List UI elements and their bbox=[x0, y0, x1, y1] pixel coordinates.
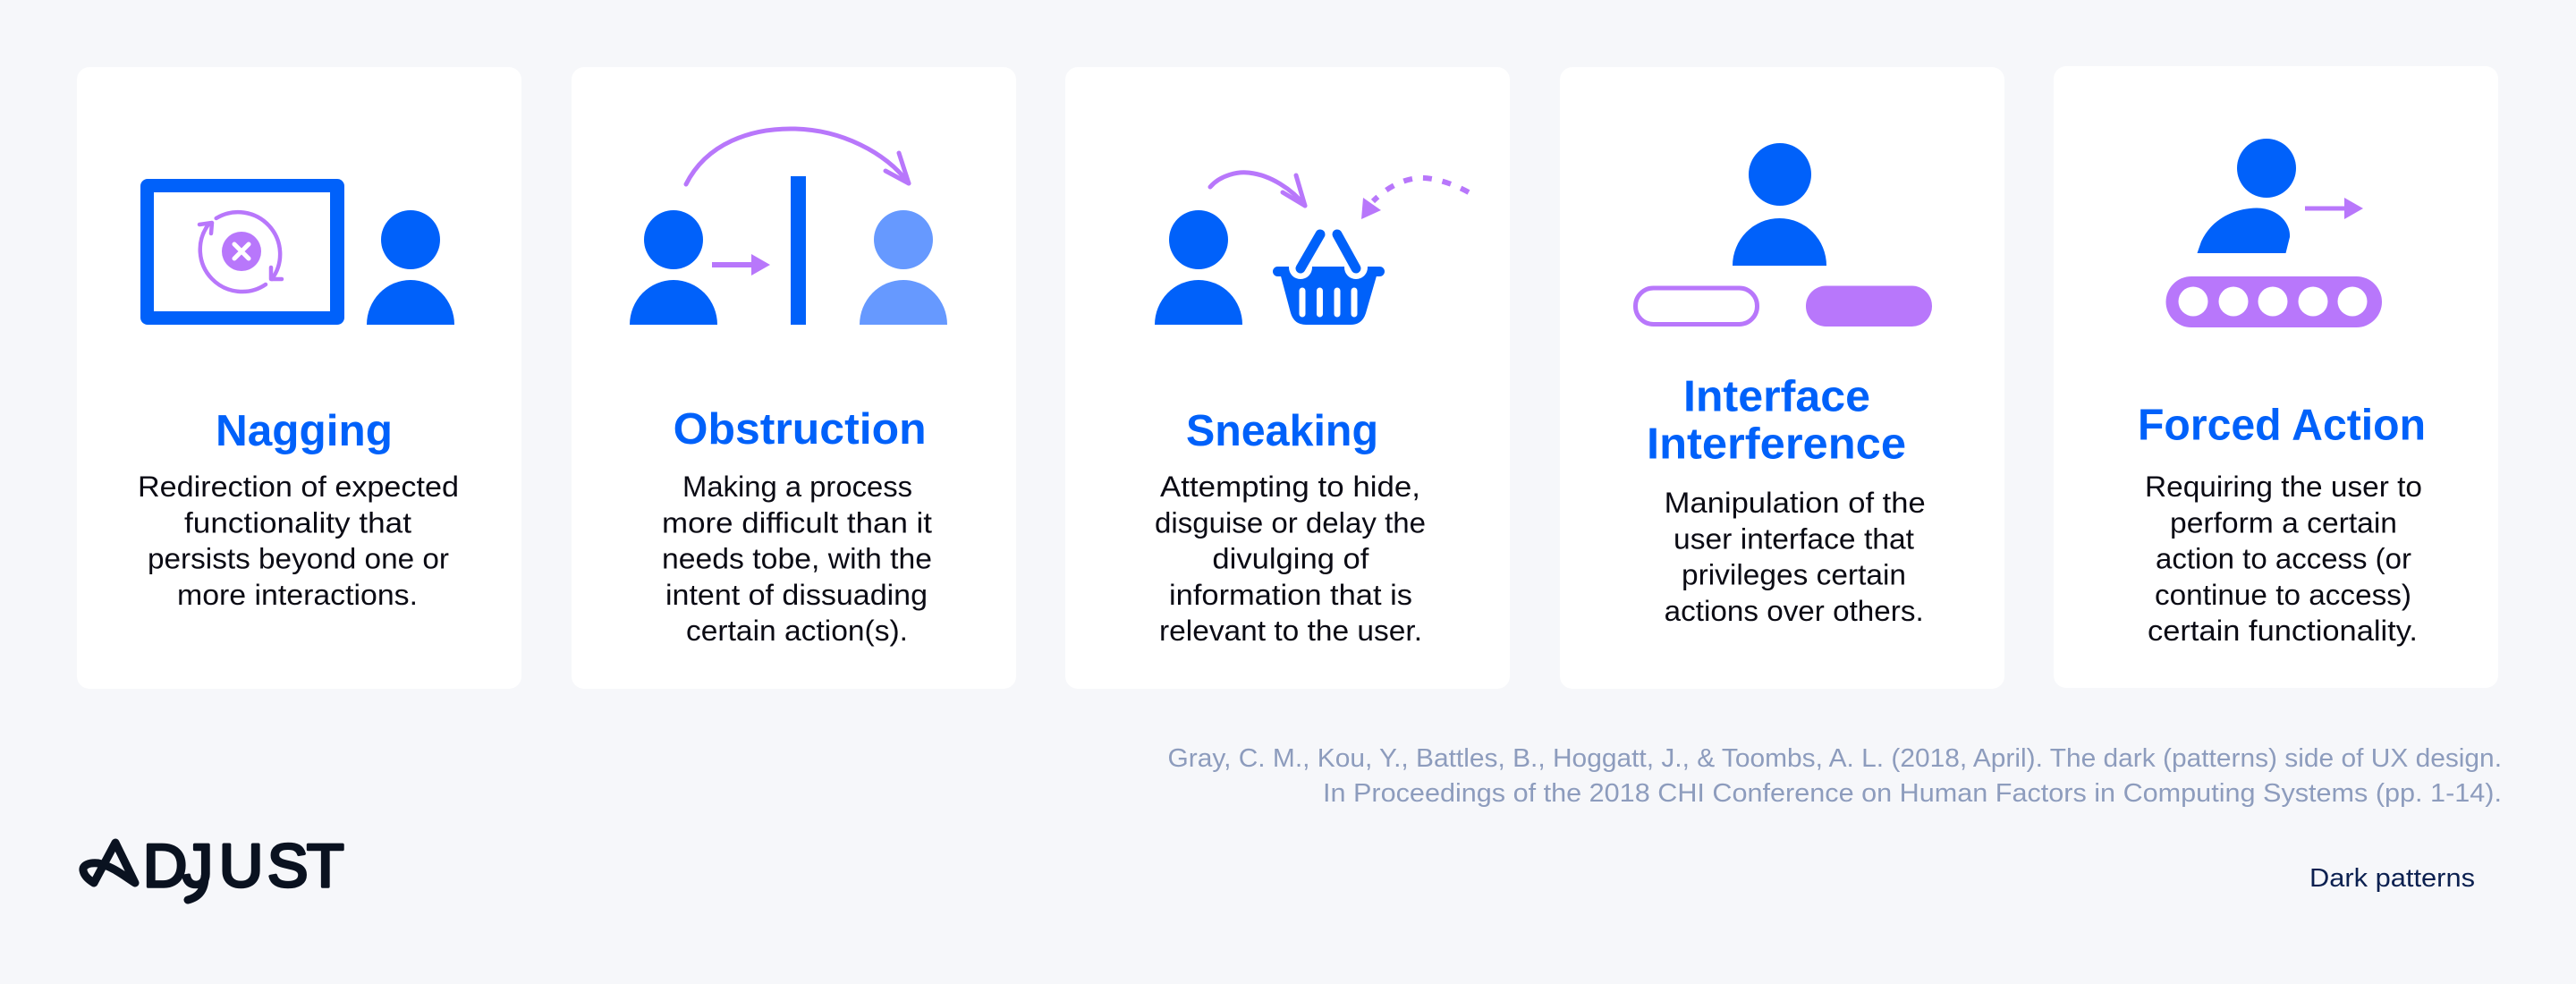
text: logo wordmark: DJUST bbox=[143, 832, 344, 900]
text: nagging description: Redirection of expected bbox=[138, 471, 459, 503]
text: forced action description: certain functionality. bbox=[2148, 615, 2418, 647]
text: interface interference description: Manipulation of the bbox=[1665, 487, 1926, 519]
text: forced action description bbox=[2145, 471, 2422, 647]
heading: Obstruction: Obstruction bbox=[674, 405, 927, 454]
icon: person and two choice buttons bbox=[1635, 143, 1932, 327]
text: obstruction description bbox=[662, 471, 932, 647]
text: sneaking description: Attempting to hide, bbox=[1160, 471, 1420, 503]
text: nagging description: more interactions. bbox=[177, 579, 418, 611]
citation: Gray, C. M., Kou, Y., Battles, B., Hoggatt, J., & Toombs, A. L. (2018, April). The dark (patterns) side of UX design. bbox=[1168, 744, 2502, 773]
text: sneaking description: divulging of bbox=[1212, 543, 1369, 575]
heading: Interface Interference: Interference bbox=[1647, 420, 1906, 469]
text: obstruction description: needs tobe, with the bbox=[662, 543, 932, 575]
citation bbox=[1168, 744, 2502, 808]
text: nagging description: persists beyond one or bbox=[148, 543, 449, 575]
citation: In Proceedings of the 2018 CHI Conference on Human Factors in Computing Systems (pp. 1-14). bbox=[1323, 779, 2502, 808]
text: nagging description bbox=[138, 471, 459, 611]
heading: Forced Action: Forced Action bbox=[2138, 402, 2426, 450]
text: forced action description: continue to access) bbox=[2155, 579, 2411, 611]
heading: Nagging: Nagging bbox=[216, 407, 393, 455]
text: interface interference description bbox=[1665, 487, 1926, 627]
J descender bbox=[188, 877, 205, 900]
text: obstruction description: Making a process bbox=[682, 471, 912, 503]
icon: logo A mark bbox=[83, 843, 135, 883]
icon: person blocked by wall bbox=[630, 129, 947, 325]
text: sneaking description: disguise or delay the bbox=[1155, 506, 1426, 539]
text: interface interference description: actions over others. bbox=[1665, 595, 1924, 627]
text: sneaking description: information that is bbox=[1169, 579, 1412, 611]
text: forced action description: perform a certain bbox=[2170, 506, 2397, 539]
icon: monitor with nagging loop and person bbox=[140, 179, 454, 325]
panel: obstruction bbox=[572, 67, 1016, 689]
panel: sneaking bbox=[1065, 67, 1510, 689]
text: obstruction description: certain action(s). bbox=[686, 615, 908, 647]
icon: person, basket and arrows bbox=[1155, 173, 1469, 325]
text: forced action description: action to access (or bbox=[2156, 543, 2411, 575]
text: sneaking description bbox=[1155, 471, 1426, 647]
heading: Interface Interference bbox=[1647, 372, 1906, 469]
text: sneaking description: relevant to the user. bbox=[1159, 615, 1422, 647]
text: interface interference description: user interface that bbox=[1674, 522, 1914, 555]
panel: forced action bbox=[2054, 66, 2498, 688]
heading: Interface Interference: Interface bbox=[1683, 372, 1870, 420]
label: Dark patterns: Dark patterns bbox=[2309, 864, 2475, 893]
text: forced action description: Requiring the user to bbox=[2145, 471, 2422, 503]
text: interface interference description: privileges certain bbox=[1682, 559, 1906, 591]
icon: person on conveyor belt bbox=[2166, 139, 2382, 327]
logo: Adjust bbox=[83, 832, 344, 900]
panel: nagging bbox=[77, 67, 521, 689]
text: nagging description: functionality that bbox=[184, 506, 411, 539]
panel: interface interference bbox=[1560, 67, 2004, 689]
text: obstruction description: intent of dissuading bbox=[665, 579, 928, 611]
heading: Sneaking: Sneaking bbox=[1186, 407, 1378, 455]
text: obstruction description: more difficult than it bbox=[662, 506, 932, 539]
